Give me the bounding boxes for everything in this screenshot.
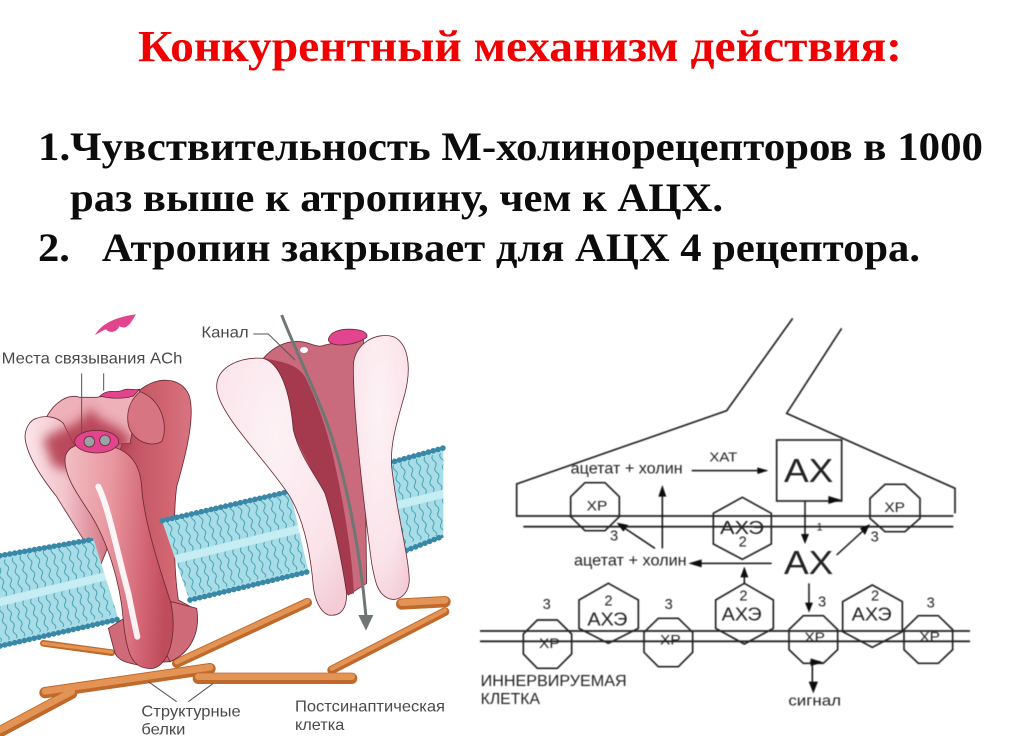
diagram labels: ХАТ [709, 449, 737, 464]
structural proteins [0, 600, 445, 732]
binding site: top [100, 389, 139, 398]
diagram labels: ХР [539, 635, 560, 651]
binding site: right receptor [328, 329, 367, 345]
diagram labels: 2 [604, 594, 612, 610]
left receptor [0, 380, 308, 668]
diagram labels: ХР [660, 632, 681, 648]
highlight [98, 487, 137, 637]
panel: synapse diagram [480, 318, 970, 709]
membrane: right section [385, 447, 443, 553]
channel dark stripe [265, 358, 354, 595]
arrowheads [617, 467, 870, 693]
membrane lines [480, 527, 970, 641]
text block: numbered points [38, 124, 983, 270]
text block: numbered points: раз выше к атропину, чем к АЦХ. [70, 175, 723, 220]
pale subunit left [217, 358, 347, 615]
floating ligand [95, 314, 136, 335]
diagram labels: 3 [665, 597, 673, 613]
acetylcholinesterase hexagons [579, 497, 902, 647]
diagram labels [481, 449, 940, 709]
diagram labels: 3 [610, 529, 618, 545]
membrane: left section [0, 538, 118, 648]
diagram labels: ХР [884, 499, 905, 515]
diagram labels: ХР [804, 629, 825, 645]
diagram labels: 3 [927, 595, 935, 611]
shading: around binding site [43, 407, 132, 470]
diagram labels: ацетат + холин [571, 460, 683, 477]
arrow: ion flow through channel [282, 315, 373, 631]
labels: клетка [295, 717, 344, 734]
diagram labels: 2 [739, 589, 747, 605]
diagram labels: ХР [919, 628, 940, 644]
pale subunit right [353, 336, 409, 599]
diagram labels: АХЭ [722, 604, 762, 625]
title: Конкурентный механизм действия: [138, 22, 902, 71]
diagram labels: АХЭ [852, 604, 892, 625]
right receptor [217, 329, 409, 615]
text block: numbered points: 2. Атропин закрывает для АЦХ 4 рецептора. [38, 225, 920, 270]
labels: Структурные [141, 704, 241, 721]
subunit: rear lobe [128, 392, 164, 444]
diagram labels: АХ [784, 545, 833, 582]
diagram labels: 2 [739, 535, 747, 551]
labels [2, 325, 445, 736]
diagram labels: 1 [817, 522, 823, 534]
labels: Места связывания ACh [2, 350, 182, 367]
subunit: front [65, 443, 173, 668]
diagram labels: КЛЕТКА [481, 691, 541, 708]
subunit: lower rear lump [108, 617, 142, 666]
channel opening highlight [300, 347, 308, 353]
diagram labels: АХЭ [587, 608, 627, 629]
diagram labels: ХР [587, 498, 607, 514]
AX box [777, 440, 842, 501]
membrane: middle section [162, 490, 308, 602]
text block: numbered points: 1.Чувствительность М-холинорецепторов в 1000 [38, 124, 983, 169]
diagram labels: 3 [871, 529, 879, 545]
diagram labels: АХ [784, 453, 833, 490]
labels: Постсинаптическая [295, 699, 445, 716]
diagram labels: ацетат + холин [574, 552, 687, 569]
arrows [618, 471, 868, 687]
labels: Канал [201, 325, 249, 342]
nerve ending outline [517, 318, 955, 516]
binding site: front [75, 430, 119, 453]
diagram labels: 2 [871, 589, 879, 605]
choline receptors [523, 483, 953, 668]
diagram labels: ИННЕРВИРУЕМАЯ [481, 673, 627, 690]
diagram labels: АХЭ [720, 517, 764, 538]
diagram labels: сигнал [788, 693, 841, 709]
subunit: rear right lower [157, 602, 197, 662]
channel interior [263, 337, 367, 595]
leader lines [82, 334, 295, 702]
diagram labels: 3 [818, 595, 826, 611]
subunit: rear right [117, 380, 197, 663]
diagram labels: 3 [543, 597, 551, 613]
subunit: pale left [25, 417, 113, 567]
panel: receptor illustration [0, 314, 445, 736]
subunit: pale rear top [47, 390, 140, 447]
